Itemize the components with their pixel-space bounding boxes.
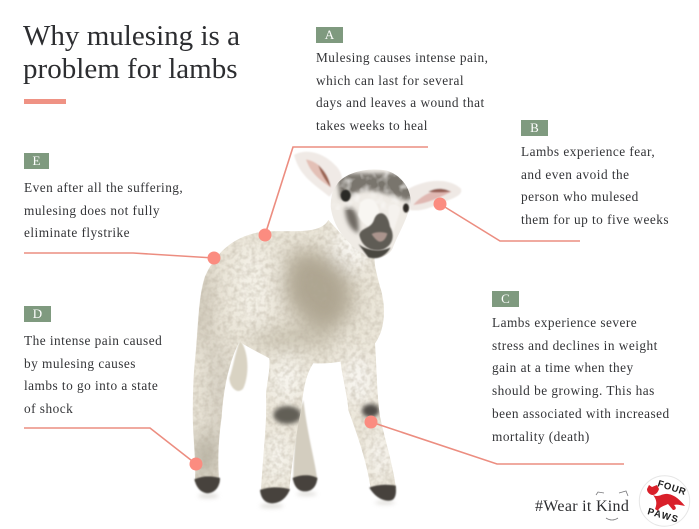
text C: mortality (death) xyxy=(492,429,590,444)
text A: which can last for several xyxy=(316,73,464,88)
text D: of shock xyxy=(24,401,73,416)
icon: cat face xyxy=(596,490,628,520)
text D: The intense pain caused xyxy=(24,333,162,348)
hooves xyxy=(194,475,396,503)
tag A: A xyxy=(325,27,334,42)
panel: E xyxy=(24,153,183,240)
text C: gain at a time when they xyxy=(492,360,634,375)
chin xyxy=(358,244,391,258)
text A xyxy=(316,50,488,133)
logo: Four Paws xyxy=(638,475,690,527)
text A: days and leaves a wound that xyxy=(316,95,485,110)
text C: should be growing. This has xyxy=(492,383,655,398)
tag B xyxy=(521,120,548,136)
text C: been associated with increased xyxy=(492,406,670,421)
text E: Even after all the suffering, xyxy=(24,180,183,195)
title: problem for lambs xyxy=(23,52,238,84)
nose tip xyxy=(372,232,387,242)
panel: D xyxy=(24,306,162,416)
paw animal xyxy=(647,485,685,511)
text C: Lambs experience severe xyxy=(492,315,637,330)
text B xyxy=(521,144,669,227)
title xyxy=(23,20,240,84)
grey crown xyxy=(337,173,413,203)
tail xyxy=(229,340,247,391)
head xyxy=(330,170,411,260)
title: Why mulesing is a xyxy=(23,20,240,52)
wool shading xyxy=(192,220,391,482)
text C: stress and declines in weight xyxy=(492,338,658,353)
PAWS: PAWS xyxy=(646,506,679,525)
text E xyxy=(24,180,183,240)
text B: Lambs experience fear, xyxy=(521,144,655,159)
marker dots xyxy=(190,198,446,470)
logo circle xyxy=(639,476,690,526)
tag C xyxy=(492,291,519,307)
wool texture xyxy=(192,222,394,488)
text D: lambs to go into a state xyxy=(24,378,158,393)
text B: and even avoid the xyxy=(521,167,630,182)
tag B: B xyxy=(530,120,539,135)
line B xyxy=(440,204,580,241)
line E xyxy=(24,253,214,258)
white nose stripe xyxy=(358,199,379,227)
text B: them for up to five weeks xyxy=(521,212,669,227)
tag E: E xyxy=(33,153,40,168)
connector lines xyxy=(24,147,624,464)
text E: eliminate flystrike xyxy=(24,225,130,240)
right ear xyxy=(407,181,461,210)
hashtag text: #Wear it Kind xyxy=(535,498,629,515)
muzzle xyxy=(359,213,393,250)
text D xyxy=(24,333,162,416)
ground shadows xyxy=(198,492,395,508)
tag A xyxy=(316,27,343,43)
lamb xyxy=(180,152,461,508)
tag E xyxy=(24,153,49,169)
lamb illustration and connector lines xyxy=(24,146,681,510)
body and legs xyxy=(192,220,396,492)
panel: B xyxy=(521,120,669,227)
text C xyxy=(492,315,670,444)
panel: C xyxy=(492,291,670,444)
text A: takes weeks to heal xyxy=(316,118,428,133)
tag D: D xyxy=(33,306,42,321)
left ear xyxy=(294,152,342,197)
text D: by mulesing causes xyxy=(24,356,136,371)
tag C: C xyxy=(501,291,510,306)
far hind leg xyxy=(293,400,317,480)
line C xyxy=(371,422,624,464)
leg markings xyxy=(273,404,379,424)
left cheek patch xyxy=(345,207,359,233)
panel: A xyxy=(316,27,488,230)
tag D xyxy=(24,306,51,322)
title underline xyxy=(24,99,66,104)
line A xyxy=(265,147,428,235)
line D xyxy=(24,428,196,464)
hashtag logo xyxy=(535,490,629,520)
FOUR: FOUR xyxy=(656,478,687,498)
eyes xyxy=(341,190,351,202)
white mottling xyxy=(340,170,411,210)
text A: Mulesing causes intense pain, xyxy=(316,50,488,65)
text B: person who mulesed xyxy=(521,189,639,204)
text E: mulesing does not fully xyxy=(24,203,160,218)
